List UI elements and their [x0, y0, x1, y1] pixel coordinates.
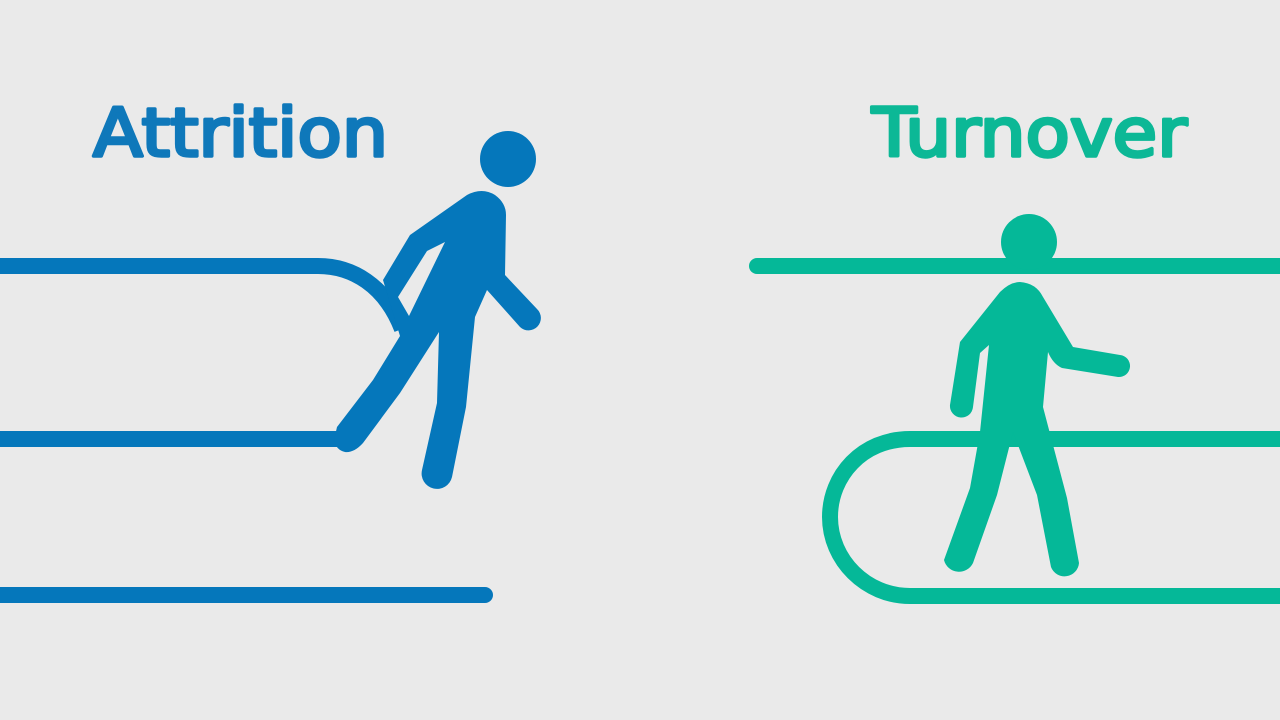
upper track curving down: [0, 266, 402, 329]
icon: walking person: [944, 214, 1130, 576]
person body, arms and legs: [334, 191, 541, 489]
heading: Turnover: Turnover: [871, 94, 1187, 172]
person body, arms and legs: [944, 282, 1130, 576]
panel: turnover: [757, 94, 1280, 596]
icon: falling person: [334, 131, 541, 489]
lower track: [0, 587, 485, 603]
looping lower track: [830, 439, 1280, 596]
person head: [480, 131, 536, 187]
panel: attrition: [0, 94, 541, 595]
middle track: [0, 431, 345, 447]
person head: [1001, 214, 1057, 270]
upper track: [757, 258, 1280, 274]
heading: Attrition: Attrition: [93, 94, 388, 172]
